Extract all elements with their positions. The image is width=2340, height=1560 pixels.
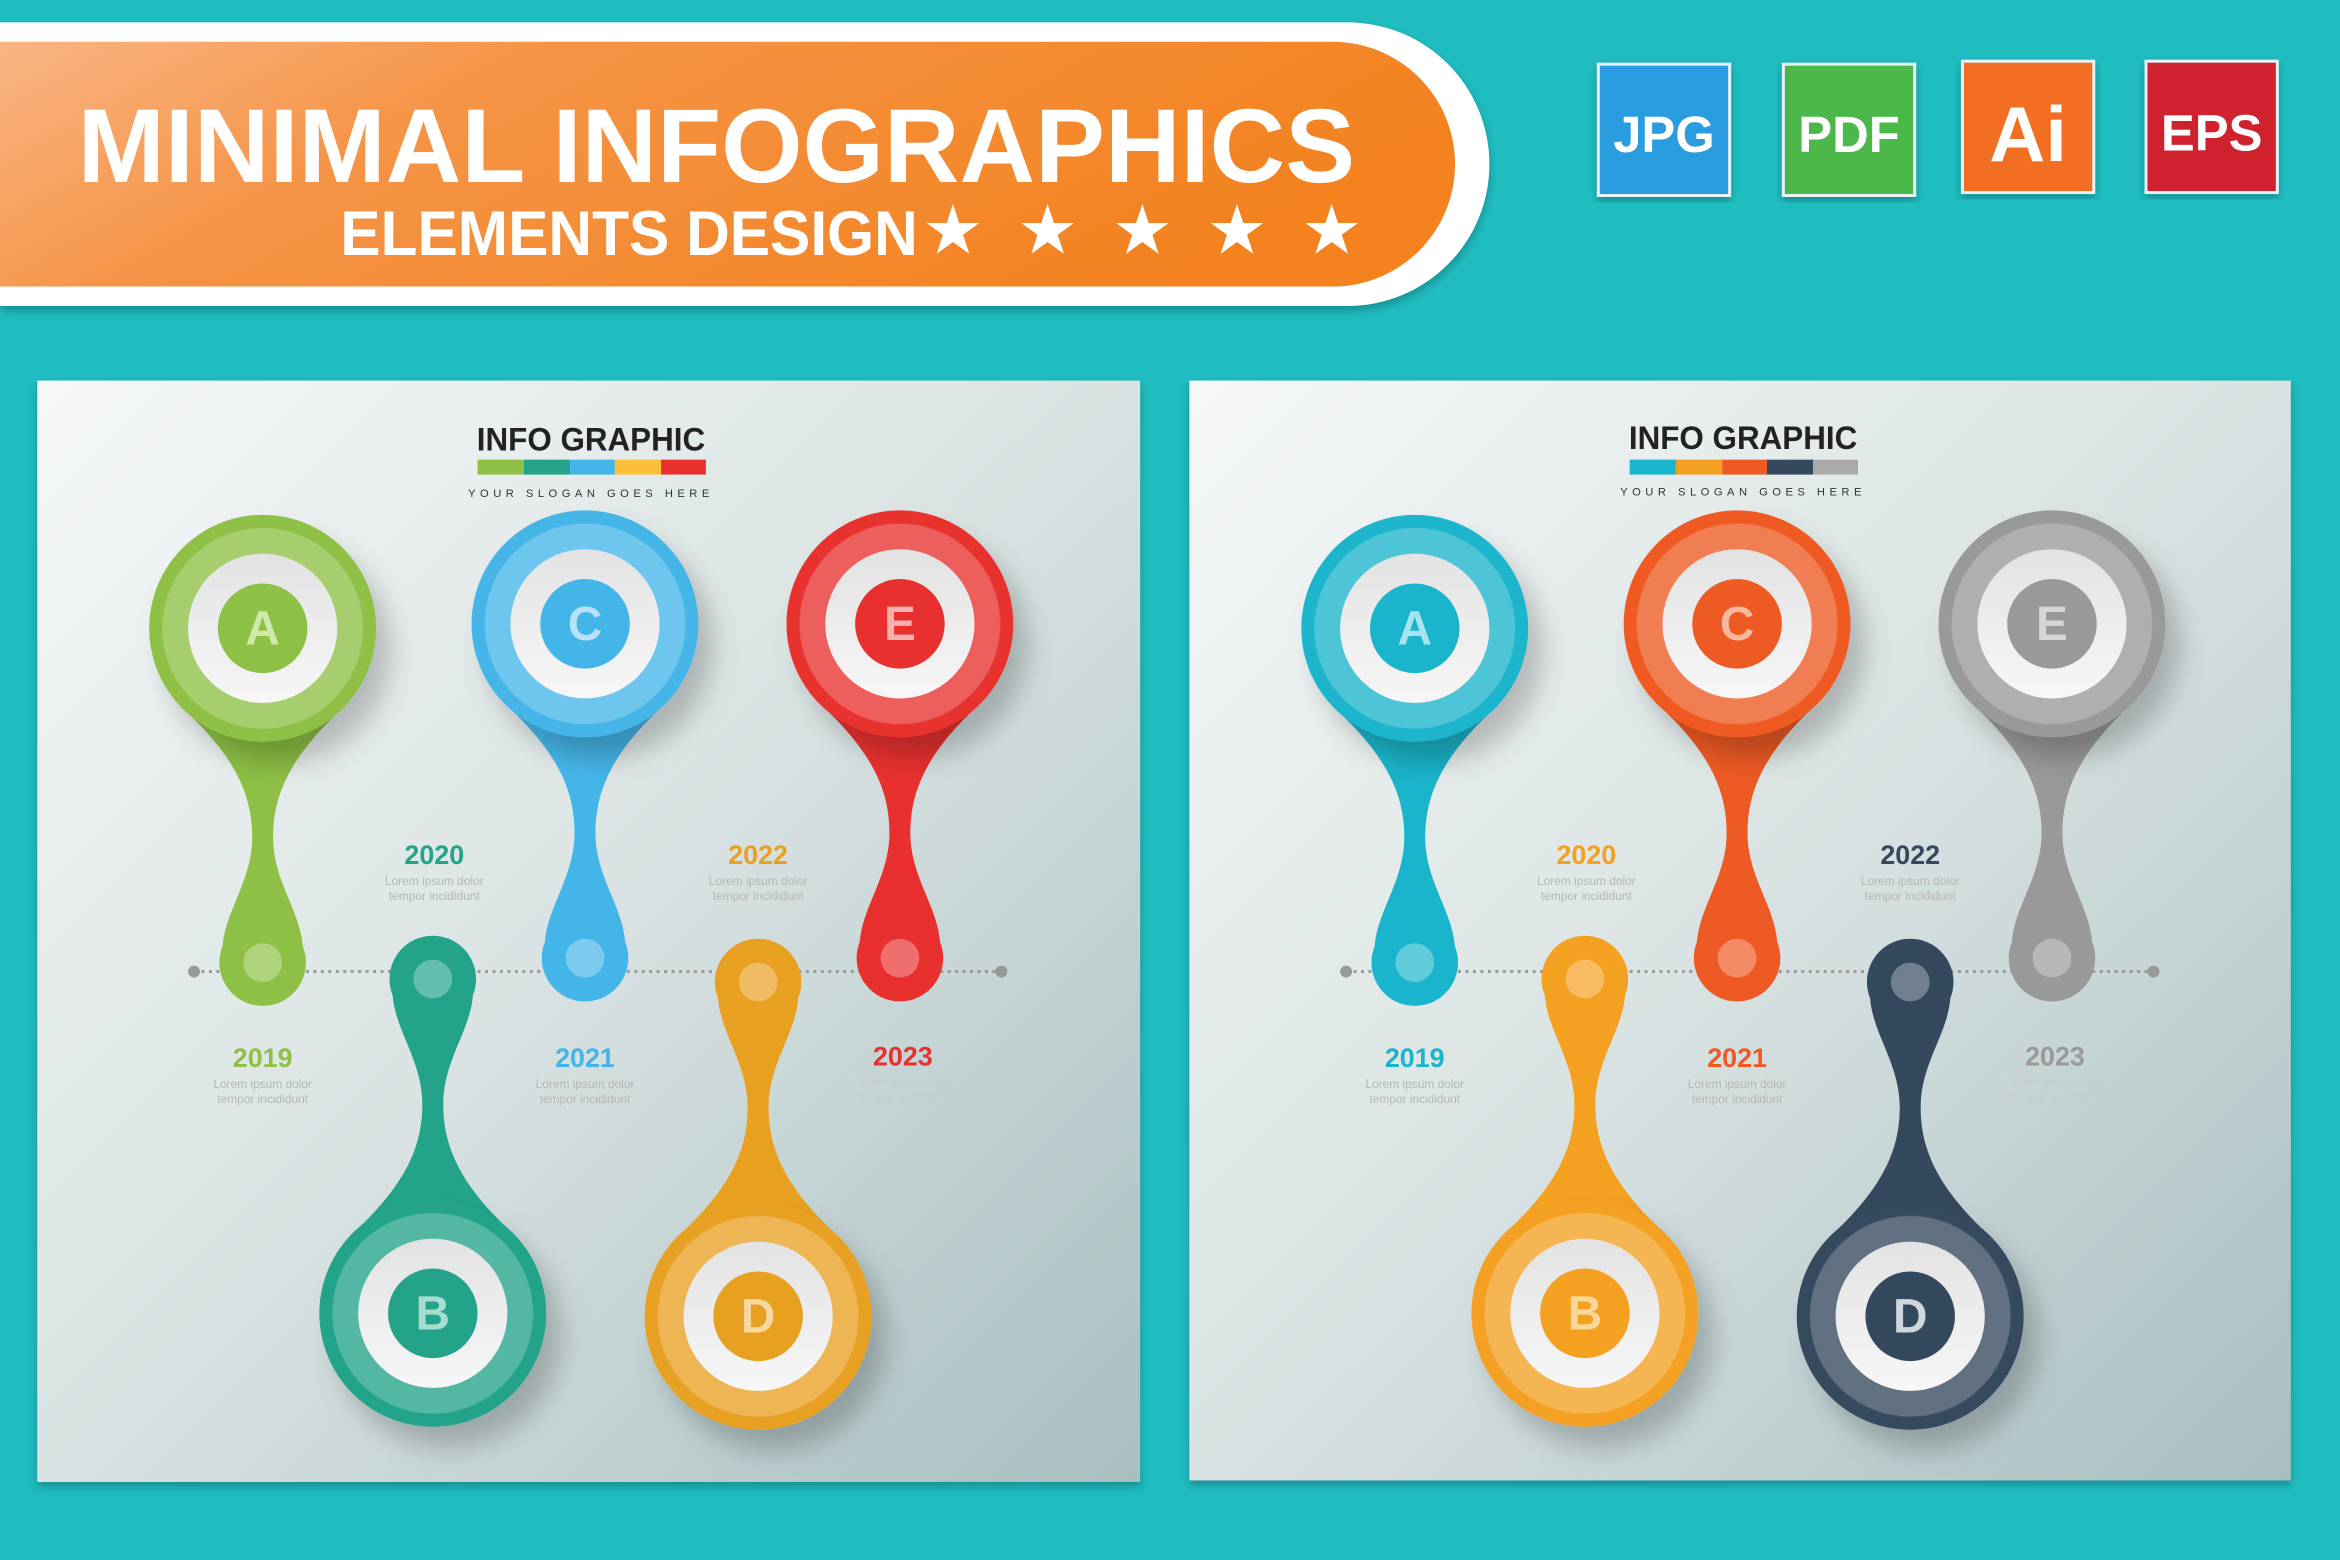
- heading: [468, 421, 714, 500]
- label 2019: Lorem ipsum dolor: [213, 1077, 312, 1091]
- label 2019: [1365, 1043, 1464, 1106]
- label 2023: [2006, 1042, 2104, 1104]
- heading: INFO GRAPHIC: [477, 421, 705, 458]
- label 2022: [1861, 840, 1960, 903]
- icon: JPG: JPG: [1613, 106, 1715, 163]
- subtitle with stars: ELEMENTS DESIGN: [340, 199, 918, 269]
- label 2020: [385, 840, 484, 903]
- label 2022: tempor incididunt: [713, 889, 804, 903]
- pin C: C: [1720, 598, 1754, 651]
- pin E: [1939, 510, 2165, 1001]
- title: MINIMAL INFOGRAPHICS: [78, 88, 1355, 205]
- pin B: B: [1568, 1288, 1602, 1341]
- icon: JPG: [1598, 64, 1730, 196]
- pin D: [645, 939, 872, 1430]
- pin A: [149, 515, 376, 1006]
- label 2023: 2023: [2025, 1042, 2085, 1072]
- pin D: [1797, 939, 2024, 1430]
- pin E: E: [884, 598, 916, 651]
- label 2019: 2019: [233, 1043, 293, 1073]
- icon: Ai: Ai: [1989, 92, 2067, 178]
- label 2021: [536, 1043, 634, 1106]
- label 2021: tempor incididunt: [1692, 1092, 1783, 1106]
- pin C: [472, 510, 698, 1001]
- pin A: [1301, 515, 1528, 1006]
- pin D: D: [741, 1291, 775, 1344]
- pin A: A: [1398, 603, 1432, 656]
- icon: EPS: EPS: [2161, 105, 2262, 162]
- panel: left timeline: [37, 381, 1140, 1482]
- label 2019: 2019: [1385, 1043, 1445, 1073]
- timeline line: [1340, 966, 2159, 978]
- label 2023: 2023: [873, 1042, 933, 1072]
- label 2022: Lorem ipsum dolor: [709, 874, 808, 888]
- label 2021: Lorem ipsum dolor: [536, 1077, 634, 1091]
- label 2020: tempor incididunt: [1541, 889, 1632, 903]
- heading: [1620, 419, 1866, 498]
- label 2020: Lorem ipsum dolor: [385, 874, 484, 888]
- label 2019: tempor incididunt: [1369, 1092, 1461, 1106]
- label 2020: [1537, 840, 1636, 903]
- heading: YOUR SLOGAN GOES HERE: [1620, 486, 1866, 498]
- label 2019: [213, 1043, 312, 1106]
- pin C: [1624, 510, 1851, 1001]
- header banner: [0, 22, 1489, 306]
- label 2021: Lorem ipsum dolor: [1688, 1077, 1786, 1091]
- label 2022: [709, 840, 808, 903]
- label 2023: tempor incididunt: [2010, 1090, 2101, 1104]
- pin C: C: [568, 598, 602, 651]
- label 2023: Lorem ipsum dolor: [2006, 1075, 2104, 1089]
- label 2020: tempor incididunt: [389, 889, 480, 903]
- label 2022: Lorem ipsum dolor: [1861, 874, 1960, 888]
- timeline line: [188, 966, 1007, 978]
- icon: PDF: [1783, 64, 1915, 196]
- label 2021: [1688, 1043, 1786, 1106]
- label 2021: tempor incididunt: [540, 1092, 631, 1106]
- label 2019: tempor incididunt: [217, 1092, 309, 1106]
- pin B: [1471, 936, 1698, 1427]
- pin D: D: [1893, 1291, 1927, 1344]
- panel: right timeline: [1189, 381, 2291, 1480]
- label 2022: tempor incididunt: [1865, 889, 1956, 903]
- label 2023: Lorem ipsum dolor: [854, 1075, 952, 1089]
- label 2020: 2020: [404, 840, 464, 870]
- label 2023: [854, 1042, 952, 1104]
- pin A: A: [245, 603, 280, 656]
- pin B: B: [416, 1288, 450, 1341]
- label 2019: Lorem ipsum dolor: [1365, 1077, 1464, 1091]
- label 2022: 2022: [728, 840, 788, 870]
- label 2020: Lorem ipsum dolor: [1537, 874, 1636, 888]
- label 2023: tempor incididunt: [857, 1090, 949, 1104]
- header banner: ★★★★★: [922, 192, 1363, 269]
- heading: YOUR SLOGAN GOES HERE: [468, 488, 714, 500]
- icon: PDF: PDF: [1798, 106, 1900, 163]
- pin E: [786, 510, 1013, 1001]
- label 2021: 2021: [1707, 1043, 1767, 1073]
- heading: INFO GRAPHIC: [1629, 419, 1857, 456]
- icon: Ai: [1962, 61, 2094, 193]
- icon: EPS: [2146, 61, 2277, 193]
- label 2022: 2022: [1880, 840, 1940, 870]
- label 2020: 2020: [1556, 840, 1616, 870]
- label 2021: 2021: [555, 1043, 615, 1073]
- pin E: E: [2036, 598, 2068, 651]
- pin B: [319, 936, 546, 1427]
